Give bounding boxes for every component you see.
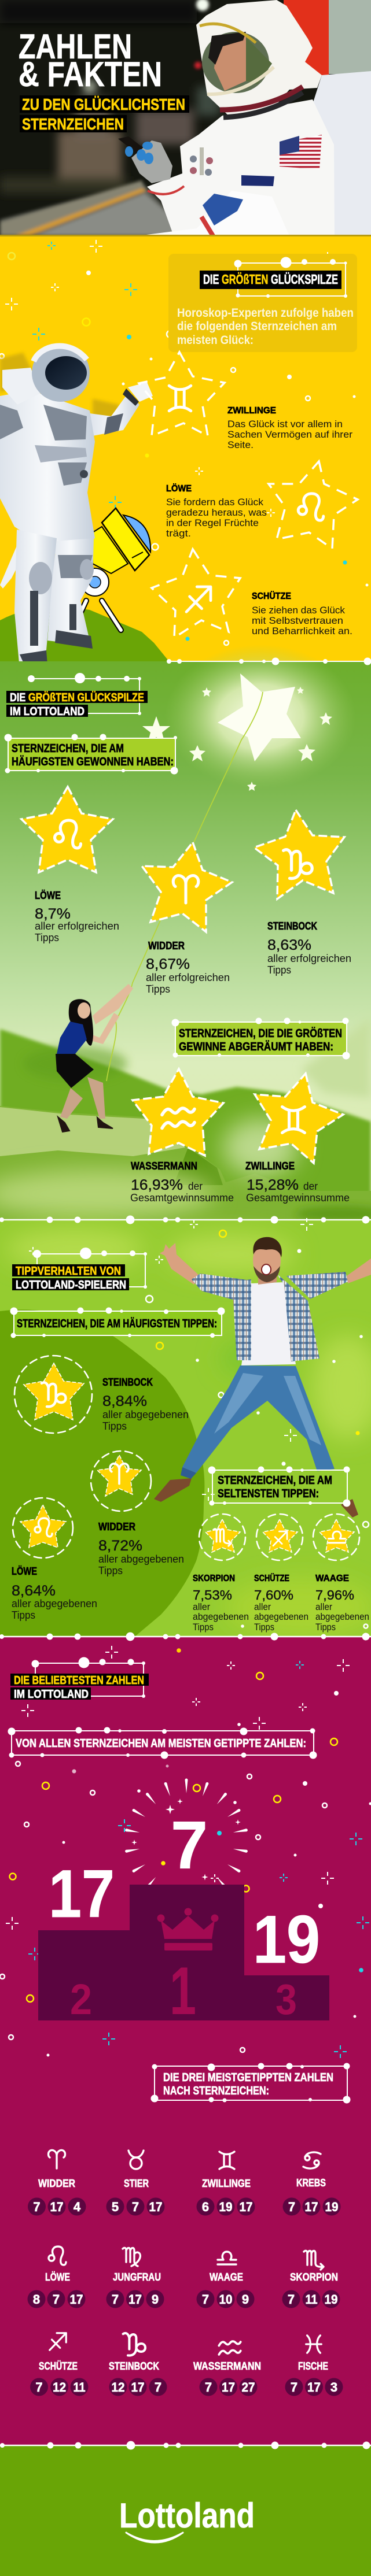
sign: Skorpion: 7 xyxy=(288,2292,295,2307)
number 7, first place: 7 xyxy=(171,1807,208,1883)
heading: Sternzeichen, die die größten Gewinne abgeräumt haben: GEWINNE ABGERÄUMT HABEN: xyxy=(179,1040,333,1053)
sign: Wassermann: 17 xyxy=(222,2380,235,2394)
podium place numbers: 1 xyxy=(170,1953,196,2029)
heading: die größten Glückspilze xyxy=(200,257,347,298)
sign: Wassermann: WASSERMANN xyxy=(193,2360,261,2372)
sign: Widder: WIDDER xyxy=(38,2178,75,2189)
stat: Steinbock 8,63%: 8,63% xyxy=(267,937,311,953)
stat: Waage 7,96%: aller xyxy=(315,1601,332,1612)
stat: Steinbock 8,63%: aller erfolgreichen xyxy=(267,953,351,964)
header panel xyxy=(0,0,371,236)
text: Zwillinge: Sachen Vermögen auf ihrer xyxy=(227,429,352,440)
stat: Waage 7,96% xyxy=(315,1574,369,1633)
intro text xyxy=(177,306,354,347)
stat: Skorpion 7,53%: Tipps xyxy=(193,1622,214,1633)
intro text: die folgenden Sternzeichen am xyxy=(177,320,337,333)
stat: Schütze 7,60%: 7,60% xyxy=(254,1587,293,1602)
stat: Wassermann 16,93%: 16,93% xyxy=(131,1177,183,1193)
stat: Löwe 8,64% xyxy=(12,1565,97,1621)
sign: Widder xyxy=(28,2150,86,2215)
sign: Wassermann xyxy=(193,2341,261,2396)
podium steps xyxy=(38,1885,329,2020)
burst rays xyxy=(125,1778,248,1889)
sign: Schütze: 11 xyxy=(73,2380,86,2394)
photo: astronaut with phone xyxy=(118,0,371,236)
text: Löwe: LÖWE xyxy=(166,483,192,494)
heading: Tippverhalten von Lottoland-Spielern: TIPPVERHALTEN VON xyxy=(16,1265,121,1278)
text: Schütze xyxy=(252,590,352,636)
title: Zahlen & Fakten: ZAHLEN xyxy=(19,27,132,66)
star: Widder xyxy=(142,842,232,932)
stat: Löwe 8,64%: Tipps xyxy=(12,1609,35,1621)
stat: Zwillinge 15,28%: 15,28% xyxy=(247,1177,299,1193)
stat: Löwe 8,7%: LÖWE xyxy=(35,890,61,901)
sign: Fische: 3 xyxy=(330,2380,337,2394)
stat: Löwe 8,7%: Tipps xyxy=(35,932,59,943)
sign: Stier: 17 xyxy=(149,2200,162,2214)
stat: Widder 8,67%: Tipps xyxy=(146,983,170,995)
sign: Krebs xyxy=(282,2152,340,2215)
text: Schütze: mit Selbstvertrauen xyxy=(252,615,343,626)
icon: telescope xyxy=(76,508,150,630)
sign: Steinbock: STEINBOCK xyxy=(109,2360,159,2372)
sign: Steinbock: 7 xyxy=(155,2380,161,2394)
decorative sparkles, rings and dots green xyxy=(29,1218,369,1628)
icon: crown xyxy=(157,1908,219,1950)
stat: Waage 7,96%: 7,96% xyxy=(315,1587,354,1602)
stat: Schütze 7,60%: SCHÜTZE xyxy=(254,1572,289,1583)
sign: Jungfrau: 9 xyxy=(152,2292,159,2307)
text: Löwe: in der Regel Früchte xyxy=(166,517,259,528)
badge: Skorpion xyxy=(199,1514,245,1560)
heading: Tippverhalten von Lottoland-Spielern: LOTTOLAND-SPIELERN xyxy=(16,1279,126,1291)
astronaut pointing xyxy=(0,344,153,665)
sign: Zwillinge: 17 xyxy=(240,2200,252,2214)
panel: Tippverhalten, bright green xyxy=(0,1218,371,1637)
photo: red pillar and wall xyxy=(284,0,371,75)
sign: Löwe: 8 xyxy=(33,2292,40,2307)
sign: Wassermann: 27 xyxy=(242,2380,255,2394)
heading: die beliebtesten Zahlen im Lottoland: DIE BELIEBTESTEN ZAHLEN xyxy=(14,1674,144,1687)
stat: Widder 8,72%: Tipps xyxy=(98,1565,123,1576)
decorative sparkles, rings and dots yellow xyxy=(0,240,368,645)
sign: Widder: 7 xyxy=(33,2200,41,2214)
heading: die drei meistgetippten Zahlen nach Sternzeichen: DIE DREI MEISTGETIPPTEN ZAHLEN xyxy=(163,2071,333,2084)
sign: Krebs: 19 xyxy=(325,2200,338,2214)
text: Schütze: und Beharrlichkeit an. xyxy=(252,626,352,636)
sign: Jungfrau: 7 xyxy=(112,2292,119,2307)
sign: Löwe: 17 xyxy=(69,2292,83,2307)
sign: Skorpion xyxy=(282,2251,340,2308)
text: Zwillinge: Das Glück ist vor allem in xyxy=(227,419,343,430)
star: Zwillinge xyxy=(139,352,225,436)
heading: Sternzeichen, die am seltensten tippen: STERNZEICHEN, DIE AM xyxy=(218,1474,332,1487)
stat: Steinbock 8,63% xyxy=(267,920,351,976)
text: Schütze: SCHÜTZE xyxy=(252,590,291,601)
text: Löwe: trägt. xyxy=(166,528,191,539)
panel: die beliebtesten Zahlen, magenta xyxy=(0,1637,371,2445)
sign: Waage xyxy=(197,2252,255,2308)
stat: Skorpion 7,53% xyxy=(193,1574,249,1633)
sign: Waage: WAAGE xyxy=(210,2271,243,2283)
sign: Steinbock xyxy=(109,2333,167,2396)
sign: Jungfrau: JUNGFRAU xyxy=(113,2271,161,2283)
dark green blob xyxy=(0,1309,204,1637)
sign: Krebs: 17 xyxy=(304,2200,318,2214)
title: Zahlen & Fakten: & FAKTEN xyxy=(19,55,162,94)
mountains background xyxy=(0,1017,371,1222)
sign: Fische xyxy=(285,2336,343,2396)
stat: Widder 8,67%: WIDDER xyxy=(148,940,185,952)
stat: Widder 8,72%: WIDDER xyxy=(98,1521,135,1533)
sign: Stier: 5 xyxy=(112,2200,119,2214)
shoes xyxy=(154,1467,358,1518)
stat: Steinbock 8,84% xyxy=(102,1376,189,1432)
jumping man xyxy=(154,1237,371,1518)
stat: Widder 8,72%: 8,72% xyxy=(98,1538,142,1554)
heading: die größten Glückspilze im Lottoland: IM LOTTOLAND xyxy=(10,705,85,718)
text: Zwillinge: Seite. xyxy=(227,439,254,450)
panel: die größten Glückspilze, yellow xyxy=(0,235,371,665)
subtitle: zu den glücklichsten Sternzeichen: STERNZEICHEN xyxy=(22,115,124,133)
number 17, second place: 17 xyxy=(49,1856,115,1931)
stat: Zwillinge 15,28%: der xyxy=(303,1180,318,1192)
sign: Zwillinge: ZWILLINGE xyxy=(202,2178,251,2189)
text: Zwillinge xyxy=(227,406,352,450)
badge: Schütze xyxy=(256,1514,303,1560)
woman pulling the rope xyxy=(56,984,133,1132)
intro box xyxy=(168,254,357,352)
stat: Löwe 8,7%: aller erfolgreichen xyxy=(35,920,119,932)
panel: die größten Glückspilze im Lottoland, green xyxy=(0,645,371,1222)
stat: Schütze 7,60%: aller xyxy=(254,1601,271,1612)
sign: Widder: 4 xyxy=(74,2200,81,2214)
photo: glove and phone xyxy=(118,136,172,183)
stat: Skorpion 7,53%: 7,53% xyxy=(193,1587,232,1602)
podium place numbers: 3 xyxy=(276,1975,297,2023)
text: Löwe: geradezu heraus, was xyxy=(166,507,267,518)
stat: Zwillinge 15,28%: Gesamtgewinnsumme xyxy=(246,1192,350,1204)
number 19, third place: 19 xyxy=(253,1901,320,1977)
heading: Sternzeichen, die die größten Gewinne abgeräumt haben xyxy=(171,1017,350,1059)
heading: die größten Glückspilze: DIE GRÖßTEN GLÜCKSPILZE xyxy=(203,272,338,287)
heading: Tippverhalten von Lottoland-Spielern xyxy=(12,1248,147,1291)
podium chart xyxy=(38,1778,329,2029)
stat: Skorpion 7,53%: SKORPION xyxy=(193,1574,235,1583)
sign: Skorpion: 19 xyxy=(324,2292,338,2307)
star: Steinbock xyxy=(254,810,344,899)
title: Zahlen & Fakten xyxy=(19,27,162,94)
heading: Sternzeichen, die die größten Gewinne abgeräumt haben: STERNZEICHEN, DIE DIE GRÖßTEN xyxy=(179,1027,342,1040)
heading: Sternzeichen, die am häufigsten gewonnen haben: HÄUFIGSTEN GEWONNEN HABEN: xyxy=(12,755,174,768)
sign: Krebs: 7 xyxy=(288,2200,295,2214)
stat: Steinbock 8,84%: aller abgegebenen xyxy=(102,1409,189,1420)
sign: Löwe xyxy=(28,2246,86,2308)
stat: Skorpion 7,53%: aller xyxy=(193,1601,210,1612)
stat: Widder 8,67%: aller erfolgreichen xyxy=(146,972,230,983)
stat: Widder 8,72%: aller abgegebenen xyxy=(98,1553,184,1565)
stat: Steinbock 8,84%: 8,84% xyxy=(102,1393,147,1409)
sign: Stier: 7 xyxy=(132,2200,139,2214)
sign: Stier xyxy=(106,2151,164,2215)
sign: Waage: 7 xyxy=(202,2292,209,2307)
heading: die drei meistgetippten Zahlen nach Sternzeichen xyxy=(150,2063,351,2103)
text: Löwe: Sie fordern das Glück xyxy=(166,497,264,508)
sign: Wassermann: 7 xyxy=(205,2380,212,2394)
sign: Waage: 9 xyxy=(242,2292,249,2307)
logo: Lottoland: Lottoland xyxy=(119,2496,255,2535)
badge: Steinbock xyxy=(14,1356,92,1433)
heading: von allen Sternzeichen am meisten getippte Zahlen: VON ALLEN STERNZEICHEN AM MEISTEN GETIPPTE ZAHLEN: xyxy=(16,1737,306,1750)
podium place numbers xyxy=(70,1953,297,2029)
photo: platform floor xyxy=(0,0,209,236)
stat: Waage 7,96%: Tipps xyxy=(315,1622,336,1633)
intro text: meisten Glück: xyxy=(177,334,254,347)
sign: Fische: 7 xyxy=(291,2380,297,2394)
podium place numbers: 2 xyxy=(70,1975,92,2023)
heading: Sternzeichen, die am häufigsten tippen xyxy=(10,1308,225,1338)
stat: Wassermann 16,93% xyxy=(130,1160,234,1204)
subtitle: zu den glücklichsten Sternzeichen: ZU DEN GLÜCKLICHSTEN xyxy=(22,95,185,113)
heading: die größten Glückspilze im Lottoland xyxy=(6,673,148,718)
heading: die drei meistgetippten Zahlen nach Sternzeichen: NACH STERNZEICHEN: xyxy=(163,2085,269,2097)
intro text: Horoskop-Experten zufolge haben xyxy=(177,306,354,320)
rope xyxy=(106,692,263,1081)
subtitle: zu den glücklichsten Sternzeichen xyxy=(20,95,189,133)
stat: Steinbock 8,84%: STEINBOCK xyxy=(102,1376,153,1388)
sign: Fische: 17 xyxy=(307,2380,321,2394)
heading: Sternzeichen, die am seltensten tippen xyxy=(208,1466,351,1507)
badge: Widder xyxy=(91,1451,151,1511)
heading: Sternzeichen, die am häufigsten gewonnen haben: STERNZEICHEN, DIE AM xyxy=(12,742,124,755)
stat: Waage 7,96%: WAAGE xyxy=(315,1574,349,1583)
decorative sparkles, rings and dots magenta xyxy=(0,1646,371,2058)
sign: Stier: STIER xyxy=(124,2178,149,2189)
stat: Löwe 8,64%: LÖWE xyxy=(12,1565,37,1577)
stat: Skorpion 7,53%: abgegebenen xyxy=(193,1611,249,1622)
star: Löwe xyxy=(269,461,358,549)
stat: Löwe 8,64%: 8,64% xyxy=(12,1583,56,1599)
star: Zwillinge xyxy=(255,1074,343,1163)
heading: Sternzeichen, die am seltensten tippen: SELTENSTEN TIPPEN: xyxy=(218,1487,319,1500)
sign: Fische: FISCHE xyxy=(298,2360,328,2372)
text: Zwillinge: ZWILLINGE xyxy=(227,406,276,416)
stat: Steinbock 8,63%: STEINBOCK xyxy=(267,920,317,932)
sign: Schütze: 7 xyxy=(35,2380,43,2394)
stat: Widder 8,67%: 8,67% xyxy=(146,956,190,972)
heading: Sternzeichen, die am häufigsten tippen: STERNZEICHEN, DIE AM HÄUFIGSTEN TIPPEN: xyxy=(17,1317,217,1330)
sign: Skorpion: SKORPION xyxy=(290,2271,338,2283)
stat: Widder 8,67% xyxy=(146,940,230,995)
zodiac grid xyxy=(28,2150,343,2396)
sign: Jungfrau: 17 xyxy=(128,2292,142,2307)
badge: Löwe xyxy=(13,1498,73,1558)
heading: von allen Sternzeichen am meisten getippte Zahlen xyxy=(8,1727,317,1759)
sign: Krebs: KREBS xyxy=(296,2177,326,2189)
stat: Widder 8,72% xyxy=(98,1521,184,1576)
stat: Schütze 7,60%: abgegebenen xyxy=(254,1611,308,1622)
heading: die größten Glückspilze im Lottoland: DIE GRÖßTEN GLÜCKSPILZE xyxy=(10,691,144,704)
text: Schütze: Sie ziehen das Glück xyxy=(252,605,345,616)
sign: Zwillinge: 6 xyxy=(202,2200,209,2214)
footer panel xyxy=(0,2446,371,2576)
heading: die beliebtesten Zahlen im Lottoland xyxy=(10,1657,149,1701)
badge: Waage xyxy=(313,1514,359,1560)
sign: Zwillinge xyxy=(197,2152,255,2215)
sign: Schütze: SCHÜTZE xyxy=(39,2360,78,2372)
sign: Waage: 10 xyxy=(219,2292,233,2307)
cast shadows xyxy=(0,353,124,419)
sign: Zwillinge: 19 xyxy=(219,2200,233,2214)
stat: Wassermann 16,93%: der xyxy=(188,1180,203,1192)
sign: Steinbock: 12 xyxy=(111,2380,125,2394)
sign: Steinbock: 17 xyxy=(131,2380,145,2394)
stat: Schütze 7,60%: Tipps xyxy=(254,1622,274,1633)
stat: Steinbock 8,84%: Tipps xyxy=(102,1420,127,1432)
stat: Schütze 7,60% xyxy=(254,1572,308,1633)
sign: Jungfrau xyxy=(106,2248,164,2308)
sign: Löwe: 7 xyxy=(53,2292,60,2307)
stat: Wassermann 16,93%: WASSERMANN xyxy=(131,1160,197,1172)
stat: Zwillinge 15,28% xyxy=(245,1160,350,1204)
star: Schütze xyxy=(152,549,240,638)
sign: Widder: 17 xyxy=(50,2200,64,2214)
stat: Löwe 8,64%: aller abgegebenen xyxy=(12,1598,97,1609)
stat: Wassermann 16,93%: Gesamtgewinnsumme xyxy=(130,1192,234,1204)
stat: Löwe 8,7%: 8,7% xyxy=(35,906,71,922)
heading: die beliebtesten Zahlen im Lottoland: IM LOTTOLAND xyxy=(14,1688,89,1701)
glowing stars xyxy=(142,645,356,791)
text: Löwe xyxy=(166,483,267,539)
stat: Löwe 8,7% xyxy=(35,890,119,943)
sign: Schütze: 12 xyxy=(53,2380,66,2394)
sign: Schütze xyxy=(30,2333,88,2396)
sign: Skorpion: 11 xyxy=(306,2292,317,2307)
sign: Löwe: LÖWE xyxy=(45,2271,70,2283)
star: Löwe xyxy=(21,787,113,872)
stat: Steinbock 8,63%: Tipps xyxy=(267,964,291,976)
star: Wassermann xyxy=(133,1069,223,1156)
stat: Zwillinge 15,28%: ZWILLINGE xyxy=(245,1160,295,1172)
green hill xyxy=(0,607,169,661)
heading: Sternzeichen, die am häufigsten gewonnen haben xyxy=(5,734,178,775)
